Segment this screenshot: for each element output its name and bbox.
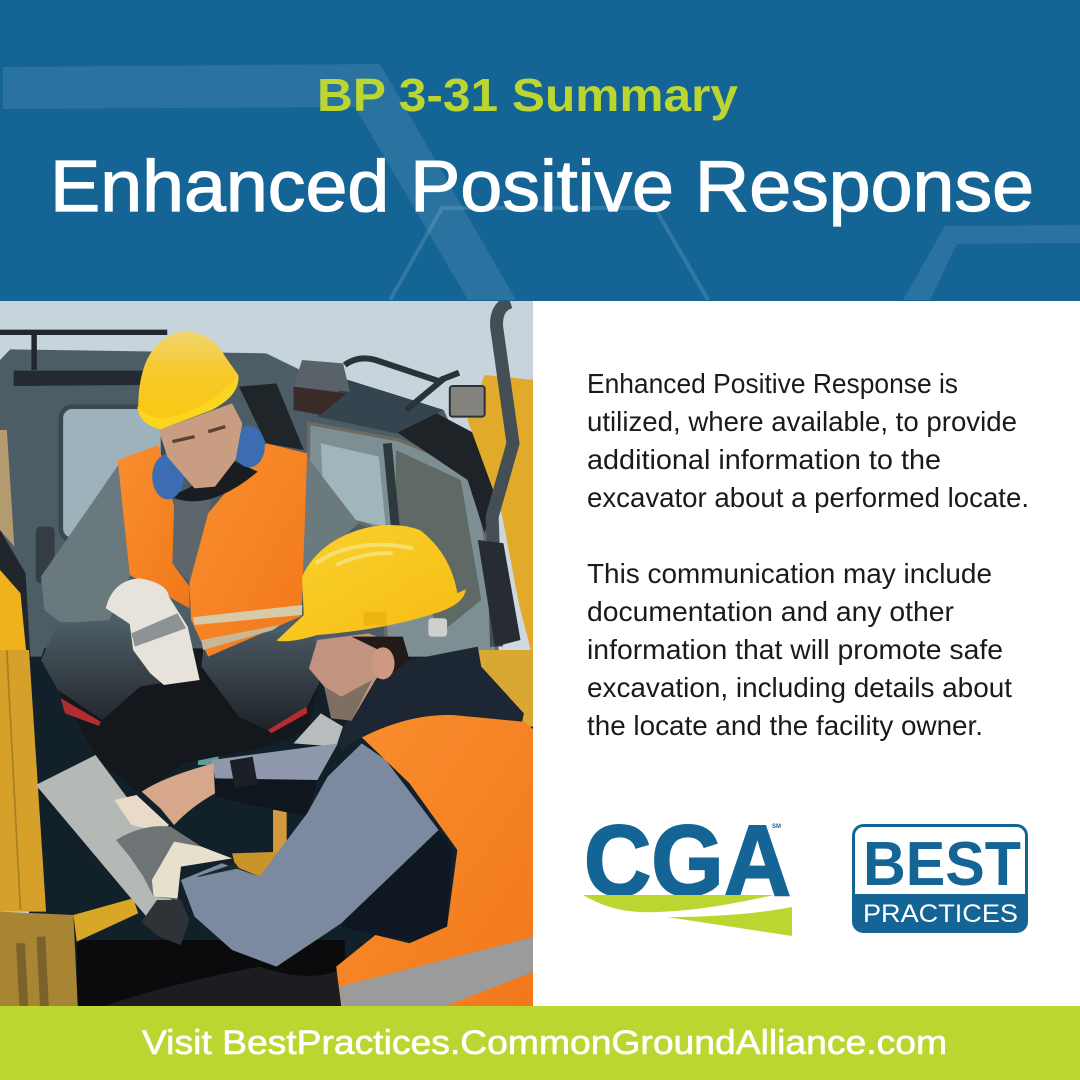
footer banner [0,1006,1080,1080]
footer link text: Visit BestPractices.CommonGroundAlliance.com [142,1024,947,1062]
right glove of crouching worker [294,713,343,747]
tablet [36,755,181,933]
torso [341,830,452,942]
hood [338,647,524,750]
photo: two workers in hard hats and orange vests reviewing a tablet [0,301,534,1007]
paragraph 1: Enhanced Positive Response is [587,368,958,399]
title: Enhanced Positive Response [50,147,1034,227]
pipe [492,302,513,647]
lower background [29,657,534,1007]
vest [118,445,189,608]
paragraph 2: information that will promote safe [587,634,1003,665]
pants [41,622,160,720]
logo: CGA: CGA [584,805,791,917]
gravel [102,967,341,1007]
earmuffs [171,460,258,501]
face [308,633,378,721]
logo: CGA: SM [772,824,781,830]
bucket [77,940,345,1007]
logo: Best Practices: BEST [863,830,1021,899]
header banner [0,0,1080,301]
paragraph 1: additional information to the [587,444,941,475]
hand [142,763,215,825]
glove [106,578,200,685]
cab [0,349,498,663]
handle and yellow gear [273,810,287,857]
face [159,403,242,488]
reflective stripe [340,937,534,1007]
paragraph 1: excavator about a performed locate. [587,482,1029,513]
paragraph 2: This communication may include [587,558,992,589]
logo: Best Practices [853,826,1027,932]
paragraph 2 [587,558,1012,741]
yellow boom [468,375,534,663]
vest [336,715,534,1007]
crouching worker black trousers [40,648,319,793]
lamp and rail [450,386,485,417]
upper worker: jacket [41,463,130,623]
lower worker hard hat [276,525,466,641]
door handle [36,527,55,583]
subtitle: BP 3-31 Summary [317,69,738,121]
logo: Best Practices: PRACTICES [863,900,1018,928]
paragraph 2: the locate and the facility owner. [587,710,983,741]
paragraph 1: utilized, where available, to provide [587,406,1017,437]
paragraph 2: excavation, including details about [587,672,1012,703]
paragraph 1 [587,368,1029,513]
white text panel background [533,301,1080,1006]
hard hat [137,332,238,429]
paragraph 2: documentation and any other [587,596,954,627]
forearm sleeve [212,743,338,780]
white paper and gloves [114,795,169,828]
jacket arm [181,743,439,967]
left yellow [0,430,14,547]
shirt [171,500,212,583]
